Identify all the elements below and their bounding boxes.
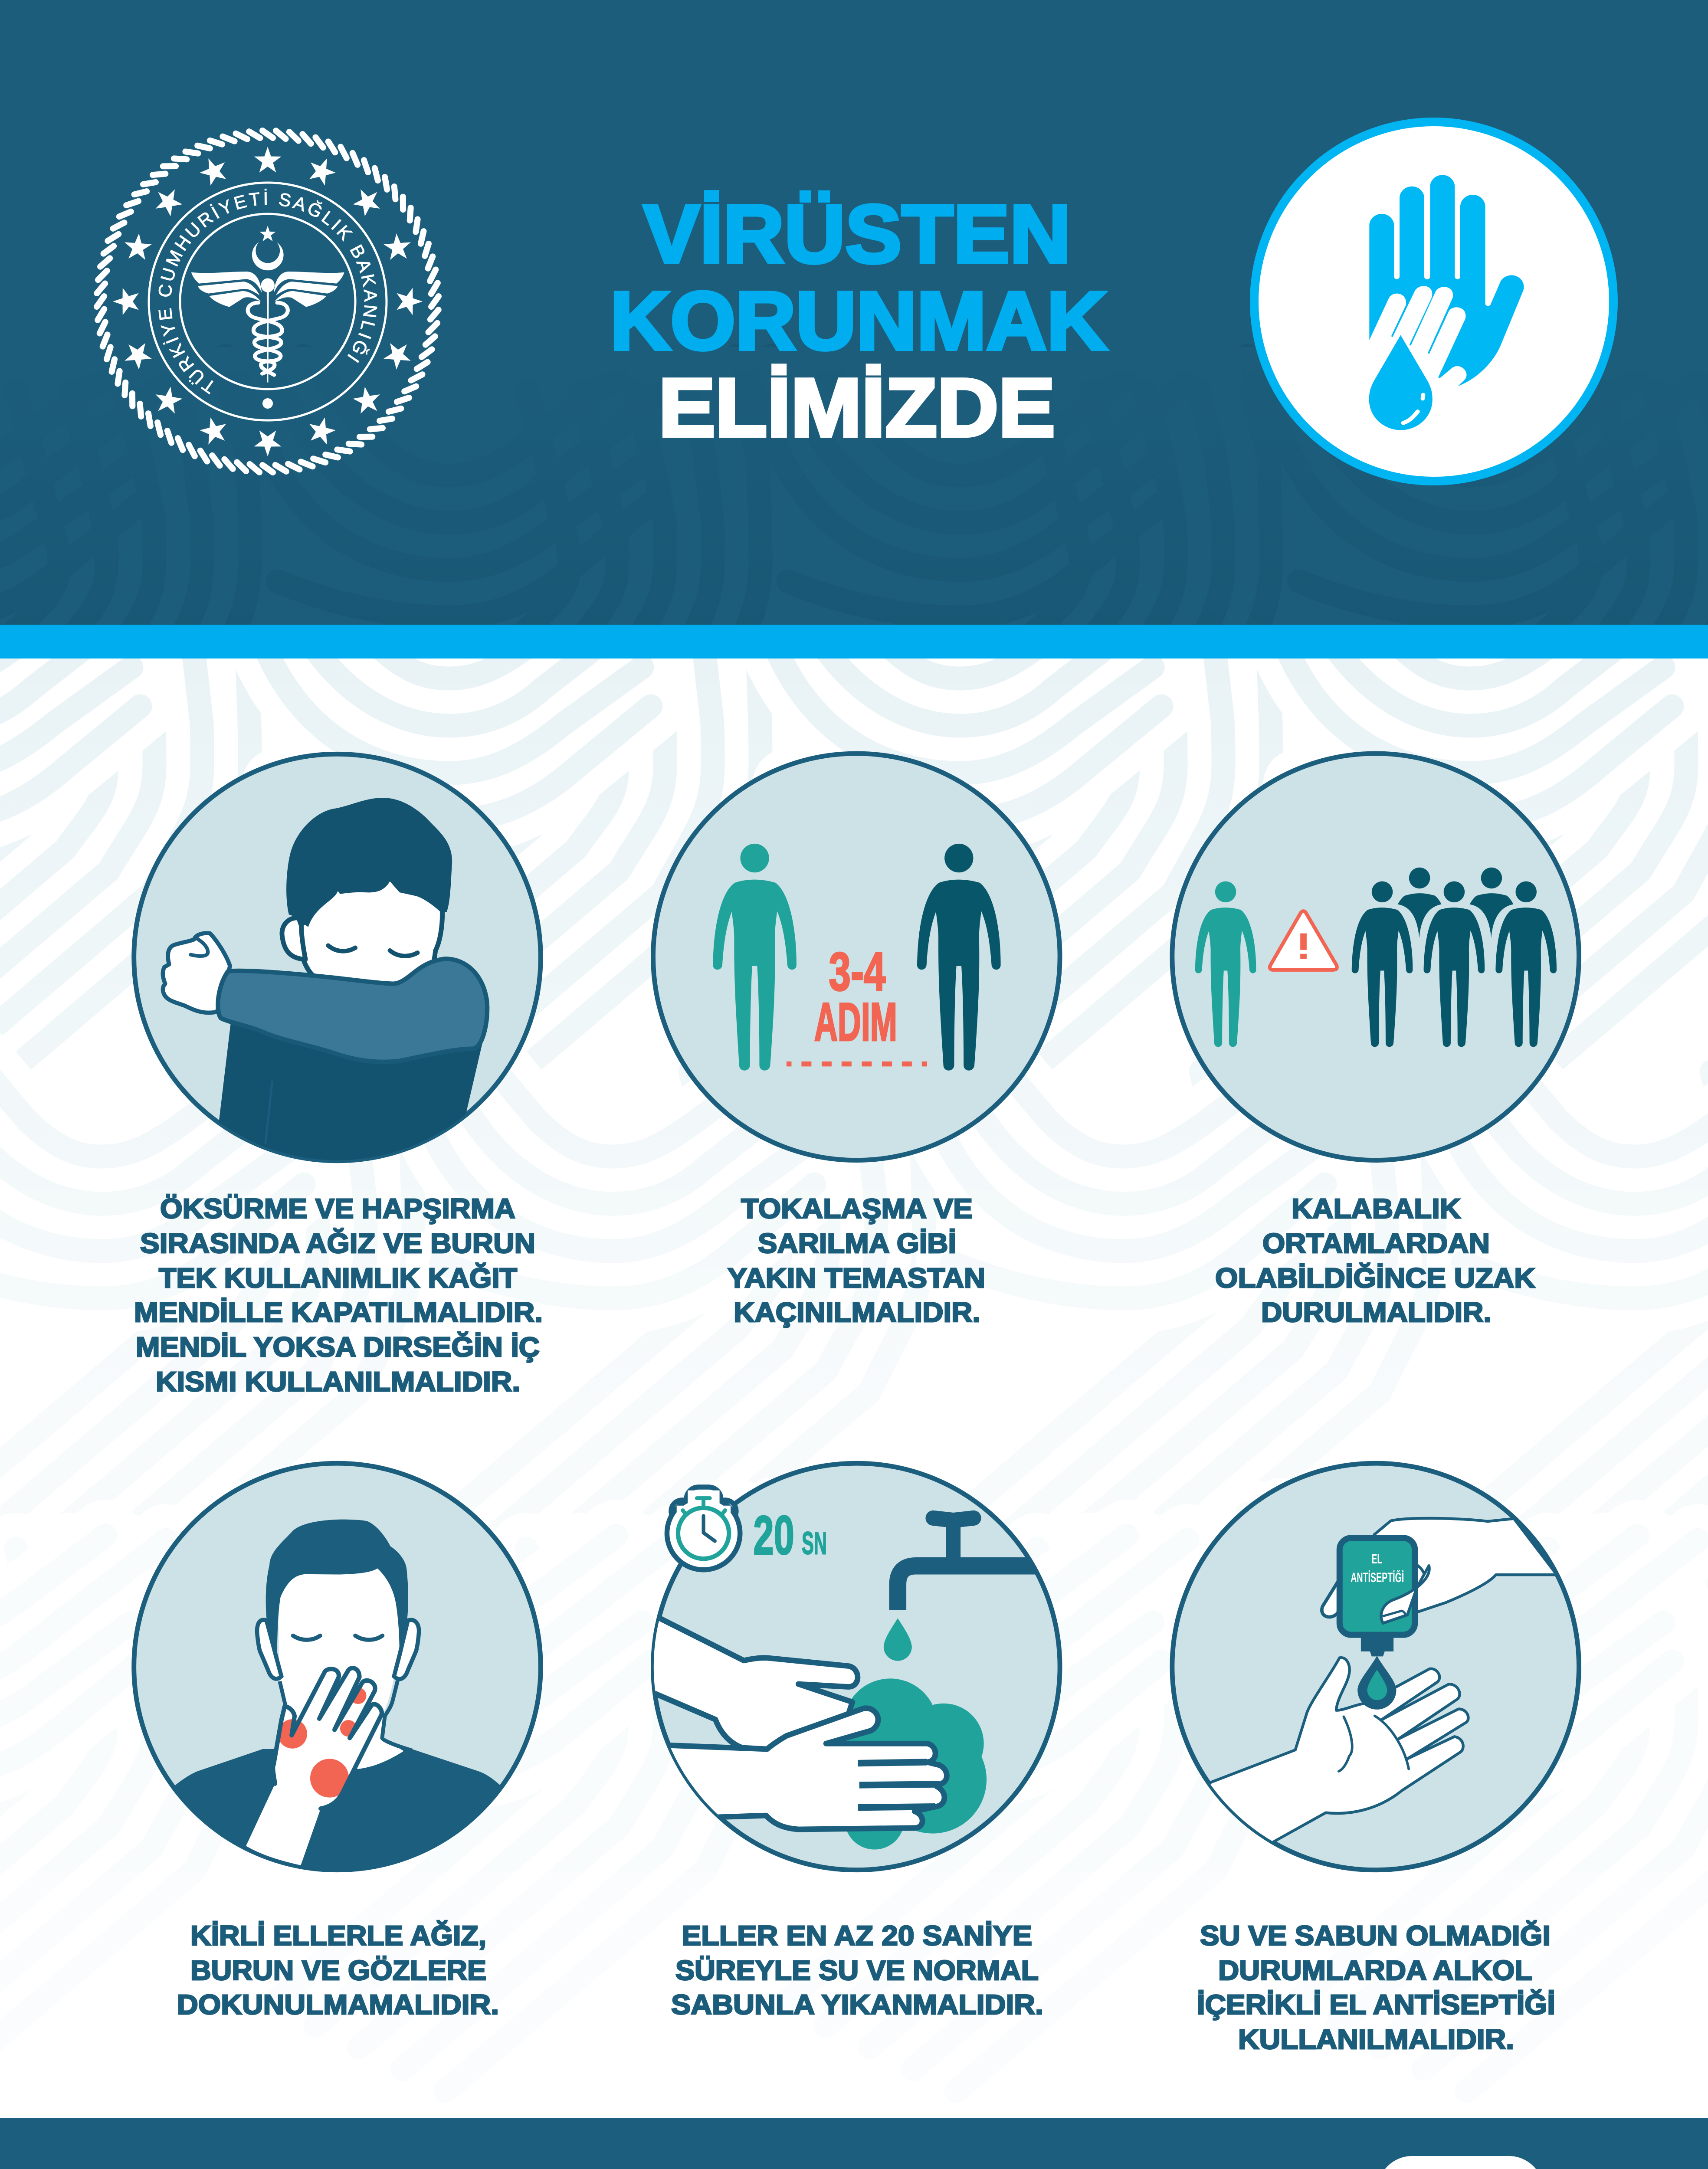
text: panel 4 caption: BURUN VE GÖZLERE	[190, 1955, 486, 1986]
illustration: hands washing under tap	[639, 1463, 1060, 1870]
icon: hand and drop badge	[1254, 122, 1613, 481]
text: panel 3 caption: ORTAMLARDAN	[1262, 1228, 1490, 1259]
illustration: two people 3-4 steps apart	[653, 754, 1060, 1160]
text: panel 5 caption: ELLER EN AZ 20 SANİYE	[682, 1920, 1032, 1951]
illustration: person coughing into elbow	[134, 754, 541, 1180]
QR code	[1377, 2156, 1544, 2169]
text: panel 6 caption: DURUMLARDA ALKOL	[1218, 1955, 1532, 1986]
panel: avoid crowds	[1172, 754, 1579, 1328]
panel: do not touch the face	[134, 1463, 541, 2020]
text: panel 6 caption: SU VE SABUN OLMADIĞI	[1200, 1920, 1551, 1951]
text: panel 1 caption: TEK KULLANIMLIK KAĞIT	[159, 1262, 517, 1294]
text: panel 6 caption: İÇERİKLİ EL ANTİSEPTİĞİ	[1197, 1989, 1555, 2020]
light blue stripe	[0, 625, 1708, 659]
text: panel 3 caption	[1215, 1193, 1535, 1328]
panel: keep distance	[653, 754, 1060, 1328]
panel: cover coughs and sneezes	[134, 754, 543, 1397]
label: el antiseptiği: EL	[1372, 1551, 1382, 1566]
icon: stopwatch	[667, 1487, 740, 1570]
text: panel 5 caption	[671, 1920, 1043, 2020]
text: panel 2 caption: KAÇINILMALIDIR.	[734, 1297, 980, 1328]
ministry logo seal: TÜRKİYE CUMHURİYETİ SAĞLIK BAKANLIĞI	[154, 188, 381, 397]
text: panel 2 caption	[728, 1193, 985, 1328]
title: ELİMİZDE	[659, 362, 1055, 454]
header band	[0, 0, 1708, 625]
title: VİRÜSTEN	[643, 188, 1071, 280]
text: panel 6 caption: KULLANILMALIDIR.	[1238, 2024, 1514, 2055]
white background with wave pattern	[0, 659, 1708, 1383]
illustration: two people 3-4 steps apart: ADIM	[814, 992, 897, 1052]
title: KORUNMAK	[610, 275, 1107, 367]
label: 20 seconds: SN	[802, 1525, 827, 1561]
text: panel 1 caption: ÖKSÜRME VE HAPŞIRMA	[160, 1193, 515, 1224]
illustration: person, warning sign and crowd	[1172, 754, 1579, 1160]
panel: wash hands for 20 seconds	[639, 1463, 1060, 2020]
text: panel 2 caption: YAKIN TEMASTAN	[728, 1262, 985, 1294]
text: panel 4 caption: DOKUNULMAMALIDIR.	[177, 1989, 499, 2020]
illustration: man touching face with dirty hand	[134, 1463, 541, 1891]
illustration: two people 3-4 steps apart: 3-4	[829, 941, 885, 1002]
text: panel 1 caption: MENDİL YOKSA DIRSEĞİN İÇ	[136, 1331, 540, 1363]
text: panel 3 caption: KALABALIK	[1292, 1193, 1461, 1224]
text: panel 3 caption: DURULMALIDIR.	[1261, 1297, 1492, 1328]
text: panel 4 caption	[177, 1920, 499, 2020]
text: panel 2 caption: SARILMA GİBİ	[758, 1228, 956, 1259]
title	[610, 188, 1107, 454]
text: panel 5 caption: SÜREYLE SU VE NORMAL	[675, 1955, 1039, 1986]
label: el antiseptiği: ANTİSEPTİĞİ	[1351, 1569, 1404, 1585]
label: el antiseptiği	[1351, 1551, 1404, 1585]
text: panel 6 caption	[1197, 1920, 1555, 2055]
panel: use hand antiseptic	[1172, 1463, 1579, 2055]
text: panel 1 caption	[134, 1193, 543, 1397]
text: panel 1 caption: SIRASINDA AĞIZ VE BURUN	[140, 1228, 535, 1259]
text: panel 1 caption: KISMI KULLANILMALIDIR.	[156, 1366, 520, 1397]
text: panel 4 caption: KİRLİ ELLERLE AĞIZ,	[190, 1920, 486, 1951]
ministry logo seal	[76, 108, 459, 495]
label: 20 seconds: 20	[753, 1504, 794, 1566]
illustration: antiseptic bottle and hands	[1172, 1463, 1579, 1870]
text: panel 5 caption: SABUNLA YIKANMALIDIR.	[671, 1989, 1043, 2020]
text: panel 3 caption: OLABİLDİĞİNCE UZAK	[1215, 1262, 1535, 1294]
text: panel 2 caption: TOKALAŞMA VE	[741, 1193, 973, 1224]
text: panel 1 caption: MENDİLLE KAPATILMALIDIR.	[134, 1297, 543, 1328]
footer band	[0, 2118, 1708, 2169]
